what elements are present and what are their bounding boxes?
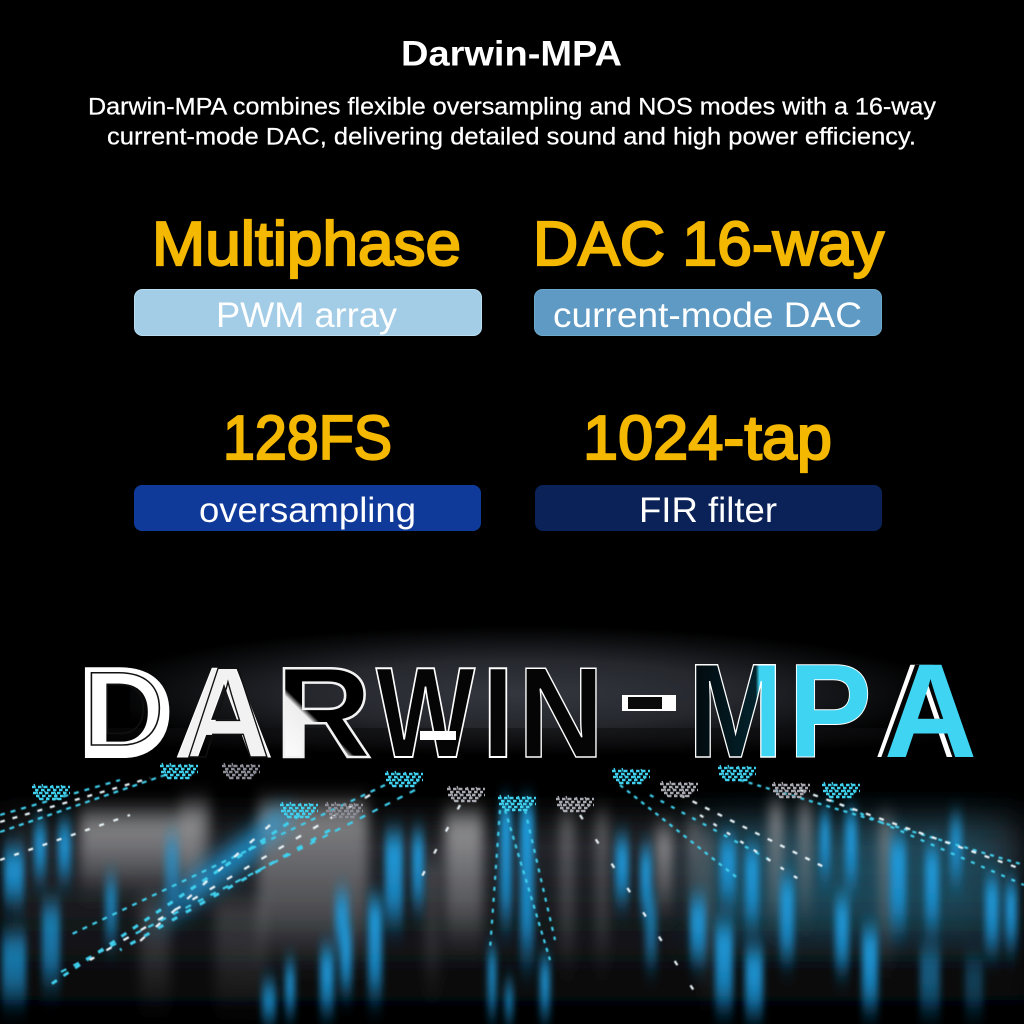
letter N: N — [518, 641, 604, 785]
letter R: R — [275, 641, 372, 785]
stat: 128FS oversampling — [134, 404, 481, 531]
reflection streaks — [0, 800, 1024, 1024]
letter A (cyan): A — [874, 637, 969, 786]
letter D: D — [84, 651, 164, 768]
letter P: P — [788, 637, 872, 786]
hyphen — [622, 695, 676, 711]
letter M: M — [688, 637, 783, 786]
intro paragraph — [88, 94, 936, 150]
stat: 128FS oversampling: oversampling — [199, 491, 416, 530]
letter I: I — [482, 641, 514, 785]
intro paragraph: Darwin-MPA combines flexible oversampling and NOS modes with a 16-way — [88, 94, 936, 120]
stat: DAC 16-way current-mode DAC: DAC 16-way — [533, 210, 884, 279]
letter A: A — [186, 641, 270, 785]
logo: DARWIN-MPA — [77, 637, 977, 786]
letter A: A — [174, 641, 274, 785]
letter D: D — [77, 641, 174, 785]
stat: 1024-tap FIR filter: 1024-tap — [583, 404, 832, 473]
stage glow behind logo — [100, 605, 940, 774]
stat: 1024-tap FIR filter: FIR filter — [639, 491, 777, 530]
title: Darwin-MPA — [401, 34, 622, 74]
stat: DAC 16-way current-mode DAC: current-mode DAC — [553, 296, 862, 335]
stat: Multiphase PWM array: Multiphase — [152, 210, 461, 279]
letter A (cyan): A — [884, 637, 977, 786]
intro paragraph: current-mode DAC, delivering detailed sound and high power efficiency. — [107, 124, 916, 150]
stat: DAC 16-way current-mode DAC — [533, 210, 884, 336]
stat: 128FS oversampling: 128FS — [223, 404, 392, 473]
data light trails — [0, 775, 1024, 1000]
letter A (cyan): A — [878, 637, 975, 786]
hyphen inner — [628, 697, 662, 709]
stat: Multiphase PWM array: PWM array — [216, 296, 398, 335]
letter W: W — [376, 641, 475, 785]
stat: 1024-tap FIR filter — [535, 404, 882, 531]
stat: Multiphase PWM array — [134, 210, 482, 336]
digit clusters at trail heads — [32, 763, 860, 818]
